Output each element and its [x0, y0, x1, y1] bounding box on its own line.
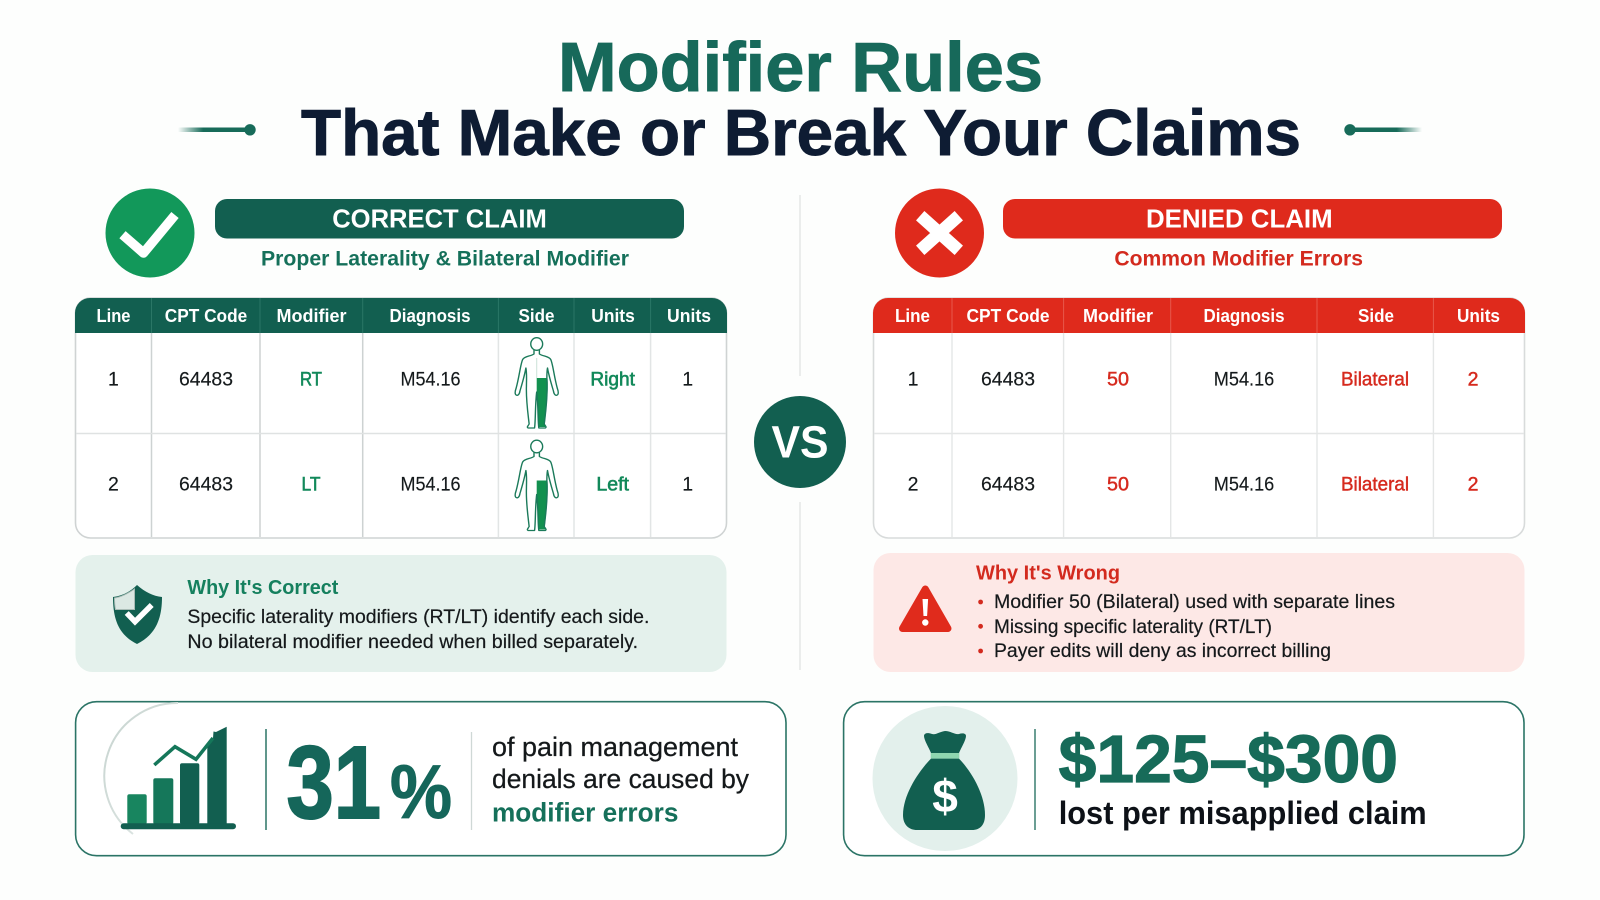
- table header row: [96, 306, 711, 326]
- table row 1: Bilateral: [1341, 368, 1409, 390]
- table header row: Line: [895, 306, 930, 326]
- icon: body figure, row 1: [515, 338, 558, 428]
- table header row: Diagnosis: [390, 306, 470, 326]
- callout: why it's wrong: [874, 553, 1524, 672]
- big number: $125–$300: [1059, 722, 1398, 797]
- table row 2: 50: [1107, 473, 1129, 495]
- table row 2: Bilateral: [1341, 473, 1409, 495]
- table row 1: 64483: [179, 368, 233, 390]
- table row 2: 2: [908, 473, 918, 495]
- table header row: Side: [518, 306, 554, 326]
- stat description: lost per misapplied claim: [1059, 795, 1427, 831]
- big number: %: [390, 750, 452, 835]
- table row 2: M54.16: [400, 473, 460, 495]
- icon: warning triangle: [902, 589, 948, 628]
- callout text: Why It's Correct: [187, 577, 339, 599]
- table header row: Modifier: [276, 306, 346, 326]
- callout: why it's correct: [76, 555, 726, 672]
- table row 1: [108, 368, 693, 390]
- stat description: of pain management: [492, 732, 738, 762]
- table row 2: 2: [108, 473, 119, 495]
- table header row: Line: [96, 306, 130, 326]
- table header row: Units: [591, 306, 635, 326]
- table row 2: 2: [1468, 473, 1478, 495]
- table row 1: 50: [1107, 368, 1129, 390]
- title: [301, 28, 1301, 169]
- table row 2: [108, 473, 693, 495]
- stat card: dollars lost: [844, 702, 1524, 856]
- callout text: Payer edits will deny as incorrect billing: [994, 640, 1331, 662]
- divider: [470, 732, 472, 830]
- heading: denied claim pill: DENIED CLAIM: [1146, 204, 1333, 234]
- title accent: right: [1344, 124, 1422, 136]
- divider: [265, 729, 267, 830]
- heading: correct claim pill: CORRECT CLAIM: [332, 204, 547, 234]
- callout text: No bilateral modifier needed when billed separately.: [187, 631, 638, 653]
- callout text: Specific laterality modifiers (RT/LT) identify each side.: [187, 606, 649, 628]
- table: denied claim: [873, 298, 1525, 538]
- table header row: Modifier: [1083, 306, 1153, 326]
- VS badge: VS: [772, 416, 828, 468]
- panel: correct claim: [75, 188, 1525, 856]
- table row 1: 2: [1468, 368, 1478, 390]
- table row 1: 1: [908, 368, 918, 390]
- table: correct claim: [75, 298, 727, 538]
- big number: 31: [286, 725, 381, 840]
- table header row: Units: [667, 306, 711, 326]
- table header row: [895, 306, 1500, 326]
- table row 2: 64483: [981, 473, 1035, 495]
- table row 2: 64483: [179, 473, 233, 495]
- icon: body figure, row 2: [515, 440, 558, 530]
- table row 1: 1: [682, 368, 693, 390]
- heading: denied claim pill: [1003, 199, 1502, 238]
- table row 1: 64483: [981, 368, 1035, 390]
- icon: red x: [895, 188, 984, 278]
- icon: money bag: [872, 706, 1018, 851]
- table header row: CPT Code: [165, 306, 247, 326]
- heading: correct claim pill: [215, 199, 684, 238]
- title accent: left: [178, 124, 256, 136]
- table row 2: Left: [596, 473, 630, 495]
- divider: [1034, 729, 1036, 830]
- subheading: Proper Laterality & Bilateral Modifier: [261, 248, 629, 270]
- callout text: Modifier 50 (Bilateral) used with separate lines: [994, 591, 1395, 613]
- callout text: Why It's Wrong: [976, 562, 1120, 584]
- subheading: Common Modifier Errors: [1114, 248, 1363, 270]
- stat description: modifier errors: [492, 798, 678, 828]
- table header row: Diagnosis: [1204, 306, 1284, 326]
- table header row: CPT Code: [966, 306, 1050, 326]
- table row 1: [908, 368, 1478, 390]
- panel: denied claim: [844, 188, 1525, 856]
- icon: rising bar chart: [104, 703, 236, 834]
- table row 2: LT: [302, 473, 321, 495]
- callout text: Missing specific laterality (RT/LT): [994, 616, 1272, 638]
- VS badge: [754, 396, 846, 488]
- title: That Make or Break Your Claims: [301, 96, 1301, 169]
- table header row: Units: [1457, 306, 1500, 326]
- table row 1: 1: [108, 368, 119, 390]
- table header row: Side: [1358, 306, 1394, 326]
- title: Modifier Rules: [558, 28, 1043, 106]
- table row 2: 1: [682, 473, 693, 495]
- icon: money bag: $: [932, 770, 958, 822]
- center divider: [799, 195, 801, 670]
- table row 1: M54.16: [400, 368, 460, 390]
- callout text: [187, 577, 649, 653]
- stat description: [492, 732, 749, 828]
- table row 2: [908, 473, 1478, 495]
- table row 2: M54.16: [1214, 473, 1274, 495]
- stat description: denials are caused by: [492, 764, 749, 794]
- table row 1: RT: [300, 368, 322, 390]
- table row 1: M54.16: [1214, 368, 1274, 390]
- stat card: 31 percent: [76, 702, 786, 856]
- big number: [286, 725, 452, 840]
- table row 1: Right: [590, 368, 636, 390]
- callout text: [976, 562, 1395, 662]
- icon: shield check: [113, 585, 162, 644]
- icon: green check: [106, 188, 194, 278]
